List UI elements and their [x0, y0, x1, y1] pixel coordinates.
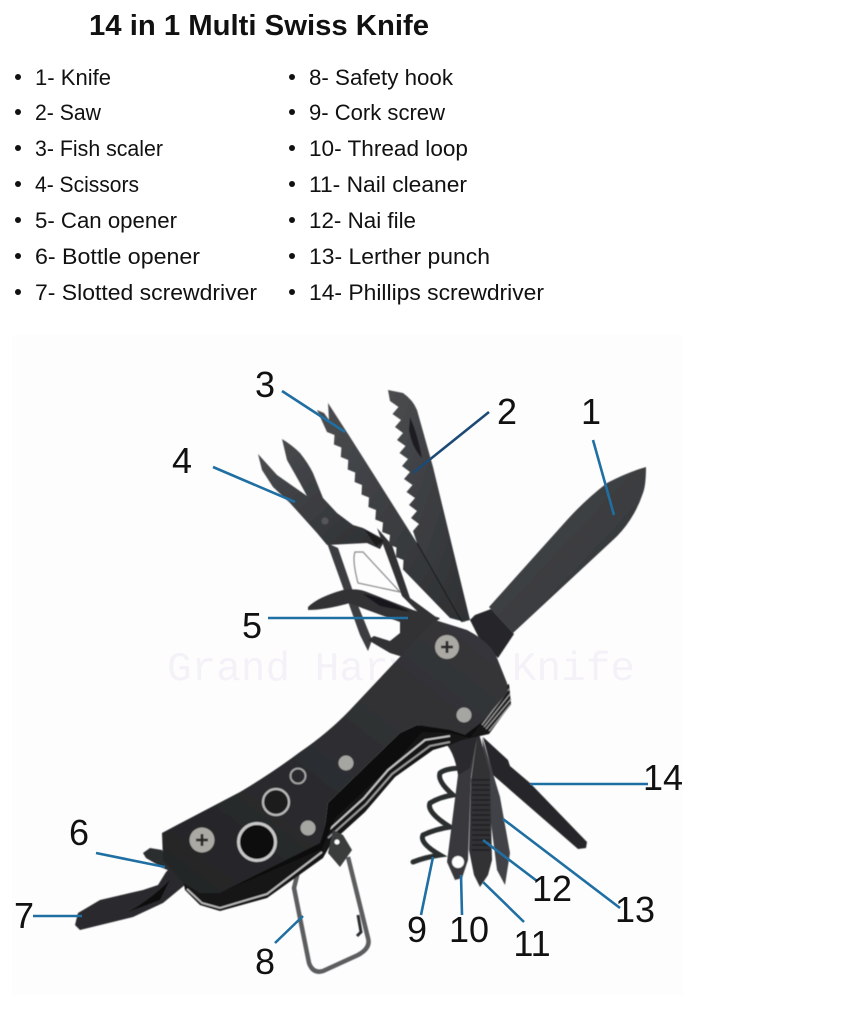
- list: tools 8 to 14: [289, 65, 544, 305]
- knife illustration: [75, 390, 646, 972]
- tool hinge block: [447, 726, 480, 775]
- callout 5: 5: [242, 605, 262, 646]
- watermark: Grand Harvest Knife: [167, 647, 635, 693]
- icon: thread loop: [447, 730, 478, 880]
- callout 7: [14, 895, 82, 936]
- icon: rear screw: [190, 828, 214, 852]
- icon: scissors: [258, 439, 385, 549]
- icon: front screw: [435, 635, 459, 659]
- list: tools 1 to 7: [15, 65, 257, 305]
- icon: small ring hole: [290, 768, 306, 784]
- icon: leather punch: [482, 737, 510, 885]
- callout 6: [69, 812, 165, 867]
- callout 7: 7: [14, 895, 34, 936]
- callout 13: 13: [615, 889, 655, 930]
- callout 6: 6: [69, 812, 89, 853]
- icon: medium ring hole: [263, 789, 289, 815]
- callout 12: 12: [532, 868, 572, 909]
- icon: carabiner tab: [328, 830, 352, 867]
- callout 11: [483, 882, 551, 964]
- icon: bottle opener and slotted screwdriver: [75, 848, 186, 930]
- handle front plate: [162, 620, 508, 893]
- icon: large ring hole: [238, 824, 276, 860]
- list: tools 1 to 7: 3- Fish scaler: [35, 136, 163, 161]
- photo background panel: [12, 335, 683, 995]
- list: tools 1 to 7: 5- Can opener: [35, 208, 177, 233]
- list: tools 1 to 7: 4- Scissors: [35, 172, 139, 197]
- list: tools 8 to 14: 13- Lerther punch: [309, 244, 490, 269]
- icon: fish scaler blade: [317, 403, 465, 622]
- icon: can opener: [308, 589, 440, 657]
- icon: corkscrew: [413, 768, 464, 862]
- callout 3: 3: [255, 364, 275, 405]
- list: tools 8 to 14: 14- Phillips screwdriver: [309, 280, 544, 305]
- callout 4: 4: [172, 440, 192, 481]
- callout 3: [255, 364, 345, 432]
- callout 13: [503, 819, 655, 930]
- handle side layers: [183, 684, 511, 911]
- callout 1: 1: [581, 391, 601, 432]
- callout 10: 10: [449, 909, 489, 950]
- icon: scissors arm and spring: [327, 543, 400, 651]
- list: tools 1 to 7: 6- Bottle opener: [35, 244, 200, 269]
- list: tools 8 to 14: 8- Safety hook: [309, 65, 454, 90]
- callout 9: 9: [407, 909, 427, 950]
- list: tools 8 to 14: 11- Nail cleaner: [309, 172, 467, 197]
- icon: safety hook carabiner: [294, 850, 369, 972]
- callout 8: [255, 916, 303, 982]
- title: 14 in 1 Multi Swiss Knife: [89, 10, 429, 42]
- callout 4: [172, 440, 295, 502]
- icon: nail file and nail cleaner: [469, 730, 492, 887]
- callout 1: [581, 391, 614, 515]
- back tool behind fish scaler: [377, 528, 440, 620]
- handle dark bevel: [220, 722, 482, 893]
- list: tools 8 to 14: 9- Cork screw: [309, 100, 445, 125]
- callout 2: [413, 391, 517, 473]
- callout 2: 2: [497, 391, 517, 432]
- list: tools 8 to 14: 12- Nai file: [309, 208, 416, 233]
- callout 14: 14: [643, 757, 683, 798]
- callout 10: [449, 875, 489, 950]
- list: tools 1 to 7: 7- Slotted screwdriver: [35, 280, 257, 305]
- callout 12: [483, 840, 572, 909]
- callout 9: [407, 857, 433, 950]
- icon: phillips screwdriver: [483, 737, 587, 849]
- callout 11: 11: [513, 923, 551, 964]
- callout 8: 8: [255, 941, 275, 982]
- icon: rivets: [300, 708, 472, 836]
- list: tools 1 to 7: 2- Saw: [35, 100, 101, 125]
- list: tools 1 to 7: 1- Knife: [35, 65, 111, 90]
- list: tools 8 to 14: 10- Thread loop: [309, 136, 468, 161]
- icon: knife blade: [470, 467, 646, 658]
- icon: saw blade: [388, 390, 470, 622]
